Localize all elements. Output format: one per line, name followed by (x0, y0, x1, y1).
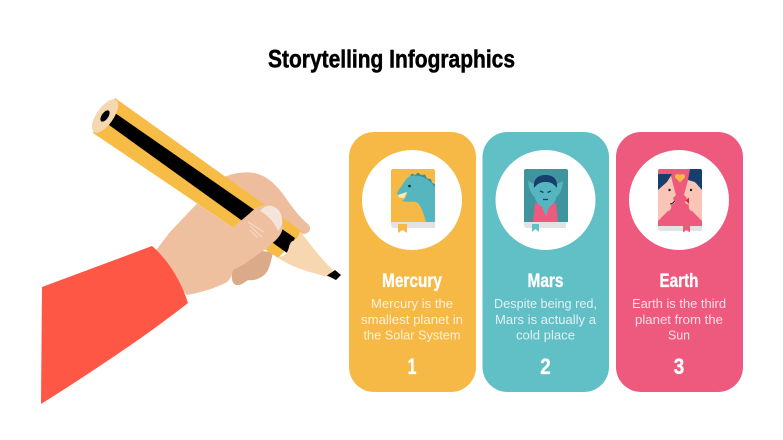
panel: Mercury (349, 132, 476, 392)
body text: Mars is actually a (495, 312, 597, 327)
hand: knuckle lines (248, 222, 264, 238)
panel: Earth (616, 132, 743, 392)
right hair (688, 169, 702, 190)
body text (494, 296, 597, 342)
icon: two faces book (658, 169, 702, 232)
card background (349, 132, 476, 392)
right face (684, 176, 702, 221)
icon: dinosaur book (391, 169, 435, 233)
heading: Earth (660, 270, 698, 292)
pencil: end cap (87, 95, 123, 137)
book pages (524, 221, 566, 228)
book cover (658, 169, 702, 226)
body text (361, 296, 463, 342)
book cover (524, 169, 568, 222)
pencil: sharpened wood (277, 231, 333, 277)
hand: palm and thumb (150, 204, 283, 295)
body text: Mercury is the (371, 296, 453, 311)
icon circle (629, 150, 729, 250)
lips and features (668, 189, 692, 204)
pencil: yellow body (93, 98, 303, 258)
pencil: black stripe (109, 113, 295, 253)
heart (675, 174, 685, 182)
hair (534, 175, 557, 188)
dinosaur crest (410, 172, 435, 190)
number: 2 (540, 354, 551, 379)
body text: Despite being red, (494, 296, 597, 311)
body text: Earth is the third (632, 296, 726, 311)
pencil: lead point (327, 270, 341, 280)
face and neck (534, 176, 557, 216)
body text: cold place (516, 328, 575, 342)
book cover (391, 169, 435, 222)
card background (616, 132, 743, 392)
sleeve (41, 246, 188, 404)
torso (533, 203, 558, 222)
panel: Mars (482, 132, 609, 392)
body text: Sun (668, 328, 690, 342)
ears (528, 181, 563, 199)
hand: lower fingers (232, 250, 273, 285)
icon circle (362, 150, 462, 250)
illustration: hand holding pencil (41, 95, 341, 404)
left face (658, 176, 676, 221)
eyes and mouth (540, 191, 551, 200)
pencil: end hole (99, 109, 111, 123)
icon: alien book (524, 169, 568, 232)
number: 3 (674, 354, 684, 379)
bookmark (532, 224, 539, 232)
heading: Mercury (382, 270, 442, 292)
book pages (658, 222, 702, 231)
hand: thumbnail (260, 206, 282, 231)
icon circle (496, 150, 596, 250)
book pages (391, 221, 435, 228)
title: Storytelling Infographics (268, 46, 515, 74)
heading: Mars (528, 270, 564, 292)
left hair (658, 174, 672, 190)
body text (632, 296, 726, 342)
pencil (87, 95, 341, 280)
dinosaur tooth (398, 192, 407, 198)
dinosaur head (397, 175, 435, 222)
bookmark (683, 224, 690, 232)
body text: smallest planet in (361, 312, 463, 327)
body text: planet from the (635, 312, 723, 327)
number: 1 (408, 354, 416, 379)
hand: back fingers (222, 172, 310, 234)
dinosaur eye (408, 185, 411, 187)
bookmark (398, 224, 407, 233)
card background (482, 132, 609, 392)
body text: the Solar System (364, 328, 460, 342)
